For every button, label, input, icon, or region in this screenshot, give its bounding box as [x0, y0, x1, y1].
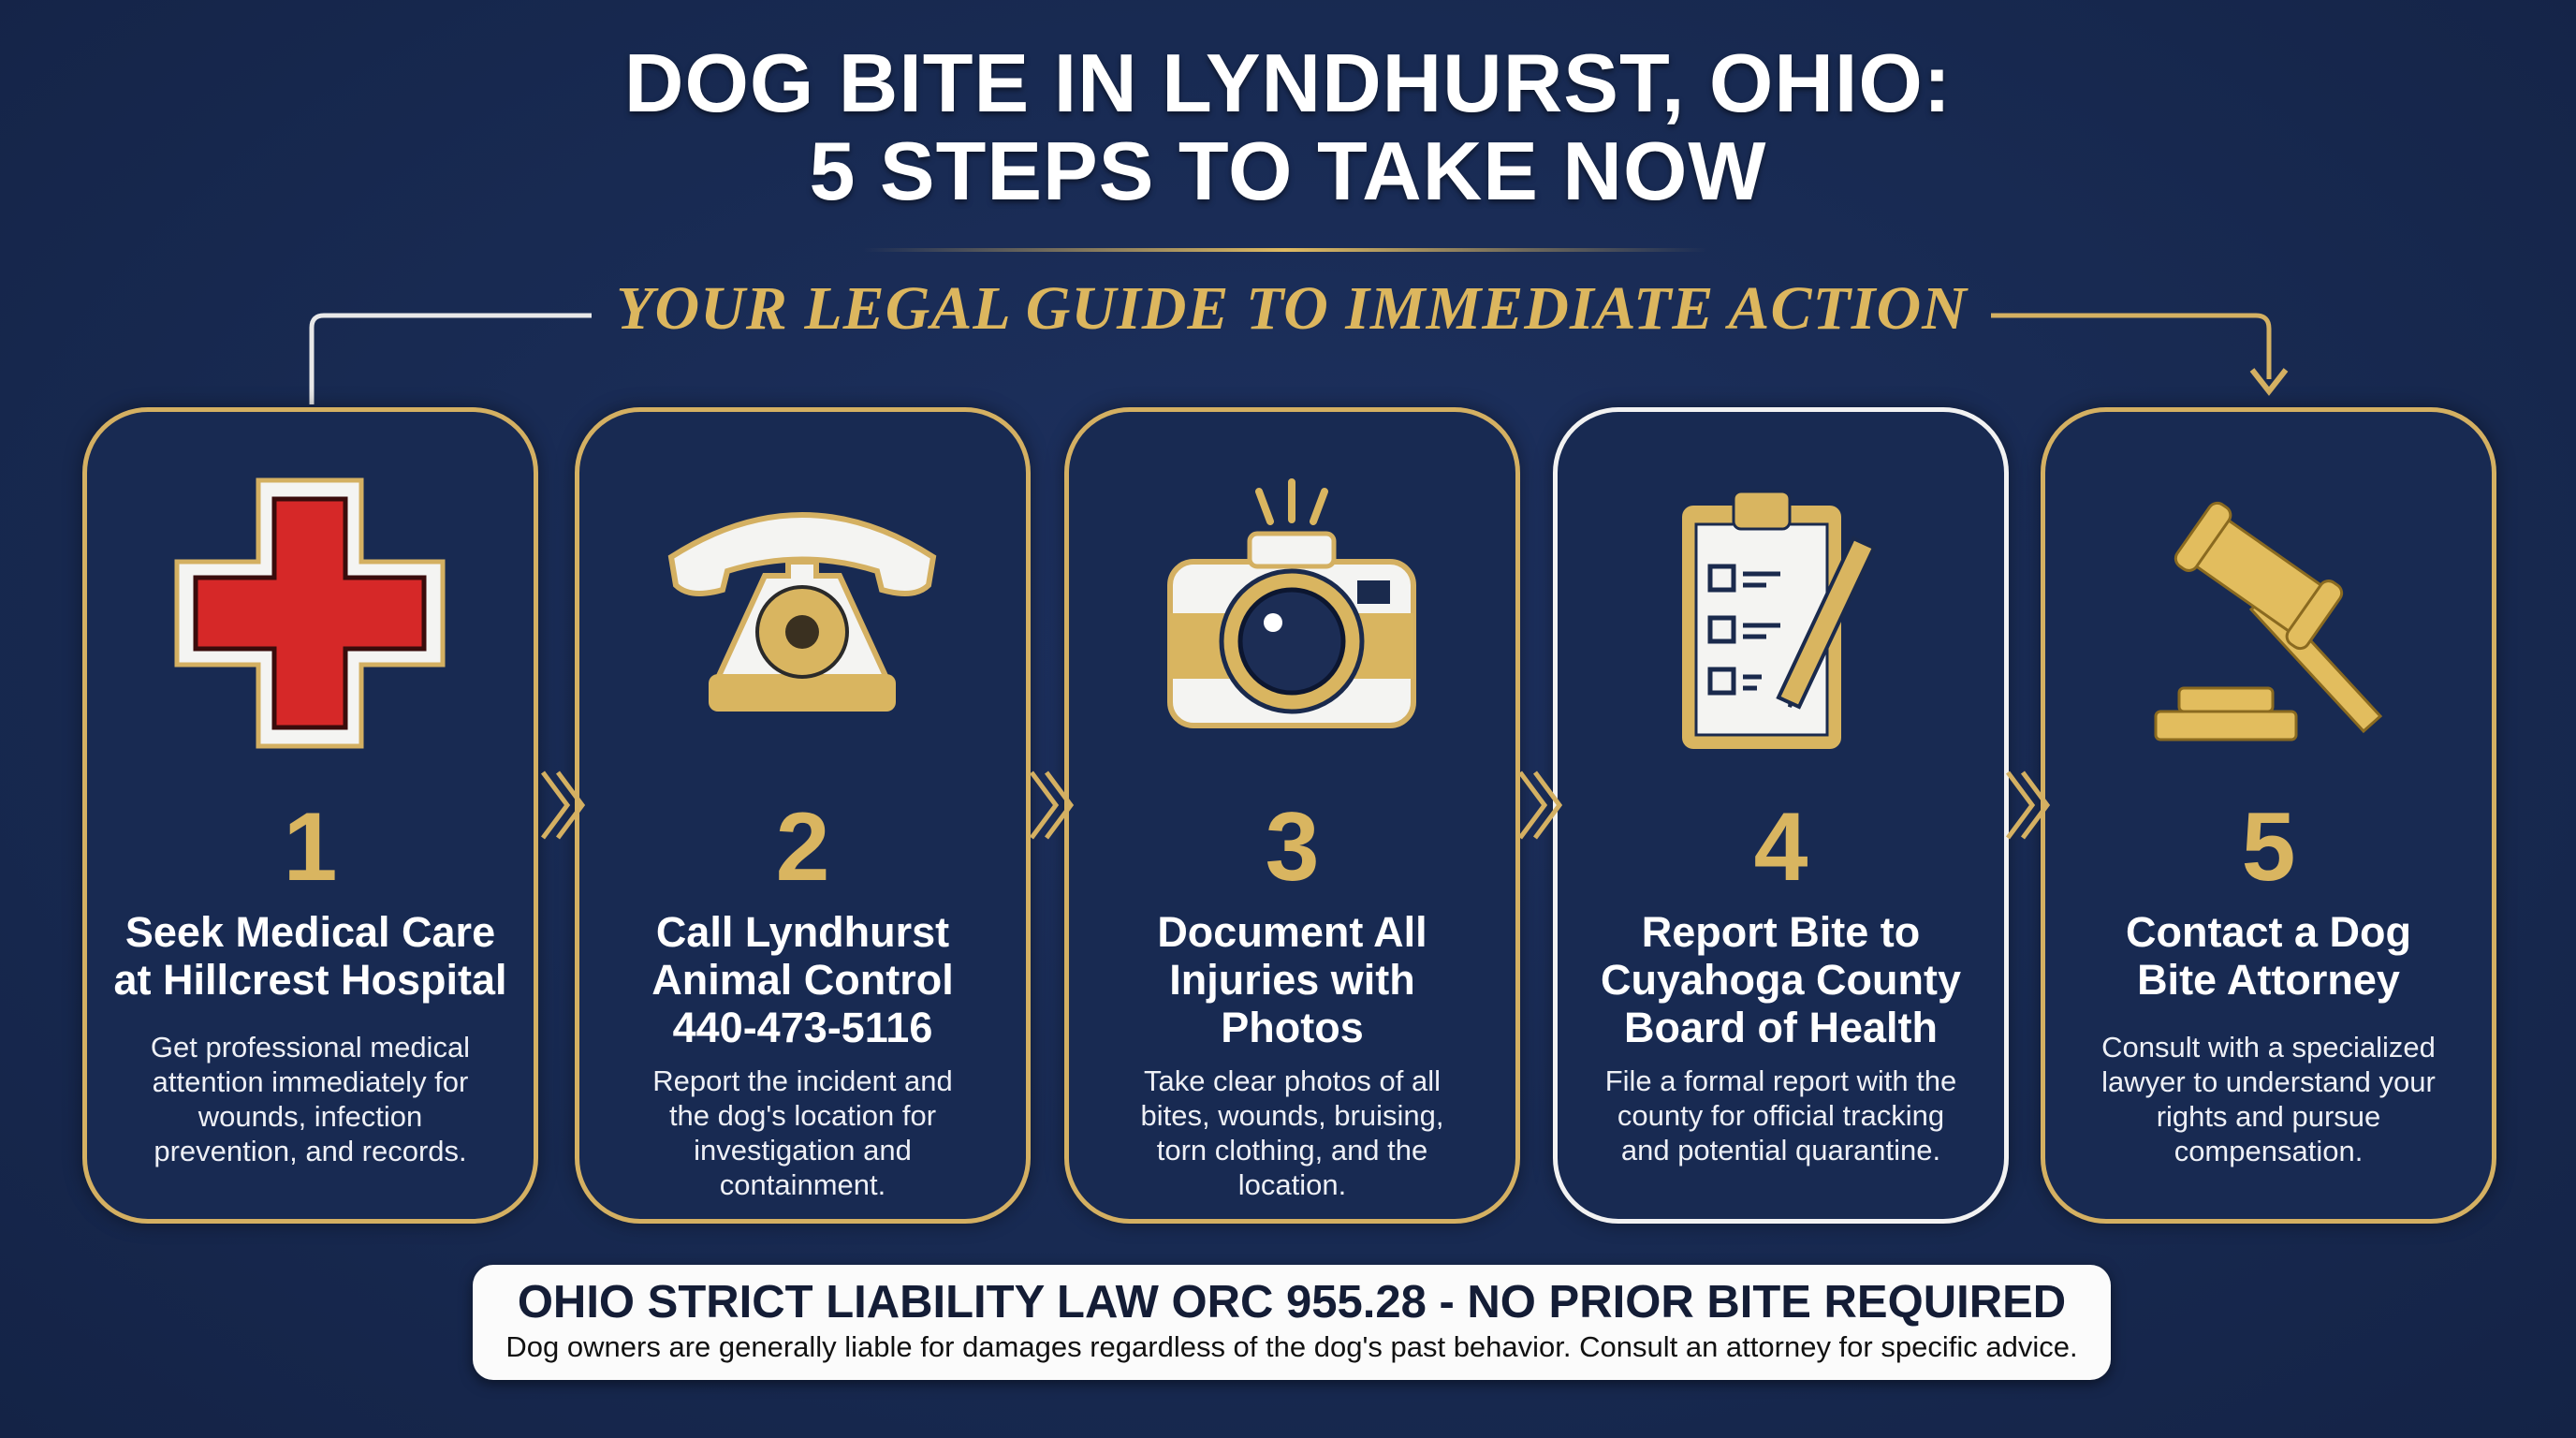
card 4: File a formal report with the: [1605, 1064, 1956, 1097]
card 3: torn clothing, and the: [1157, 1134, 1427, 1167]
icon: medical cross: [174, 477, 446, 749]
card 1: wounds, infection: [198, 1100, 422, 1133]
card 1: at Hillcrest Hospital: [113, 956, 507, 1004]
card 1: 1: [284, 793, 337, 902]
card 2: Animal Control: [651, 956, 954, 1004]
chevron 4-5: [2006, 771, 2050, 839]
footer heading: OHIO STRICT LIABILITY LAW ORC 955.28 - NO PRIOR BITE REQUIRED: [518, 1277, 2066, 1328]
card 4: county for official tracking: [1617, 1099, 1944, 1132]
footer note: Dog owners are generally liable for damages regardless of the dog's past behavior. Consult an attorney for specific advice.: [505, 1330, 2078, 1363]
subtitle: YOUR LEGAL GUIDE TO IMMEDIATE ACTION: [616, 274, 1968, 343]
connector arrows: [309, 313, 2288, 404]
card 2: 2: [776, 793, 829, 902]
card 3: location.: [1238, 1168, 1346, 1201]
title: 5 STEPS TO TAKE NOW: [810, 125, 1766, 217]
title: [624, 37, 1952, 217]
card 3: bites, wounds, bruising,: [1141, 1099, 1443, 1132]
card 2: 440-473-5116: [673, 1004, 932, 1051]
card 2: investigation and: [694, 1134, 912, 1167]
card 5: Bite Attorney: [2137, 956, 2400, 1004]
footer callout: [473, 1265, 2111, 1380]
card 1: Seek Medical Care: [125, 908, 495, 956]
card 5: Contact a Dog: [2126, 908, 2411, 956]
card 3: 3: [1266, 793, 1319, 902]
card 5: Consult with a specialized: [2101, 1031, 2436, 1064]
card 2: containment.: [720, 1168, 886, 1201]
card 5: [2041, 407, 2496, 1224]
icon: telephone: [668, 512, 936, 712]
icon: gavel: [2155, 502, 2382, 741]
card 2: Report the incident and: [652, 1064, 953, 1097]
chevron 3-4: [1520, 771, 1562, 839]
card 4: and potential quarantine.: [1621, 1134, 1940, 1167]
card 3: Take clear photos of all: [1144, 1064, 1441, 1097]
title: DOG BITE IN LYNDHURST, OHIO:: [624, 37, 1952, 129]
card 3: Photos: [1221, 1004, 1364, 1051]
card 5: rights and pursue: [2157, 1100, 2380, 1133]
card 3: [1064, 407, 1520, 1224]
card 5: compensation.: [2174, 1135, 2363, 1167]
icon: camera: [1167, 478, 1416, 728]
card 1: attention immediately for: [153, 1065, 468, 1098]
chevron 1-2: [541, 771, 585, 839]
card 2: Call Lyndhurst: [656, 908, 949, 956]
card 3: Document All: [1157, 908, 1427, 956]
card 4: 4: [1754, 793, 1808, 902]
chevron 2-3: [1031, 771, 1074, 839]
card 5: lawyer to understand your: [2101, 1065, 2436, 1098]
card 2: [575, 407, 1031, 1224]
gold divider: [862, 248, 1708, 252]
card 2: the dog's location for: [669, 1099, 936, 1132]
card 3: Injuries with: [1169, 956, 1415, 1004]
card 4: Report Bite to: [1642, 908, 1920, 956]
card 4: [1553, 407, 2009, 1224]
icon: clipboard: [1682, 492, 1872, 749]
card 4: Cuyahoga County: [1601, 956, 1961, 1004]
card 4: Board of Health: [1624, 1004, 1938, 1051]
card 5: 5: [2242, 793, 2295, 902]
card 1: [82, 407, 538, 1224]
card 1: Get professional medical: [151, 1031, 470, 1064]
card 1: prevention, and records.: [154, 1135, 467, 1167]
